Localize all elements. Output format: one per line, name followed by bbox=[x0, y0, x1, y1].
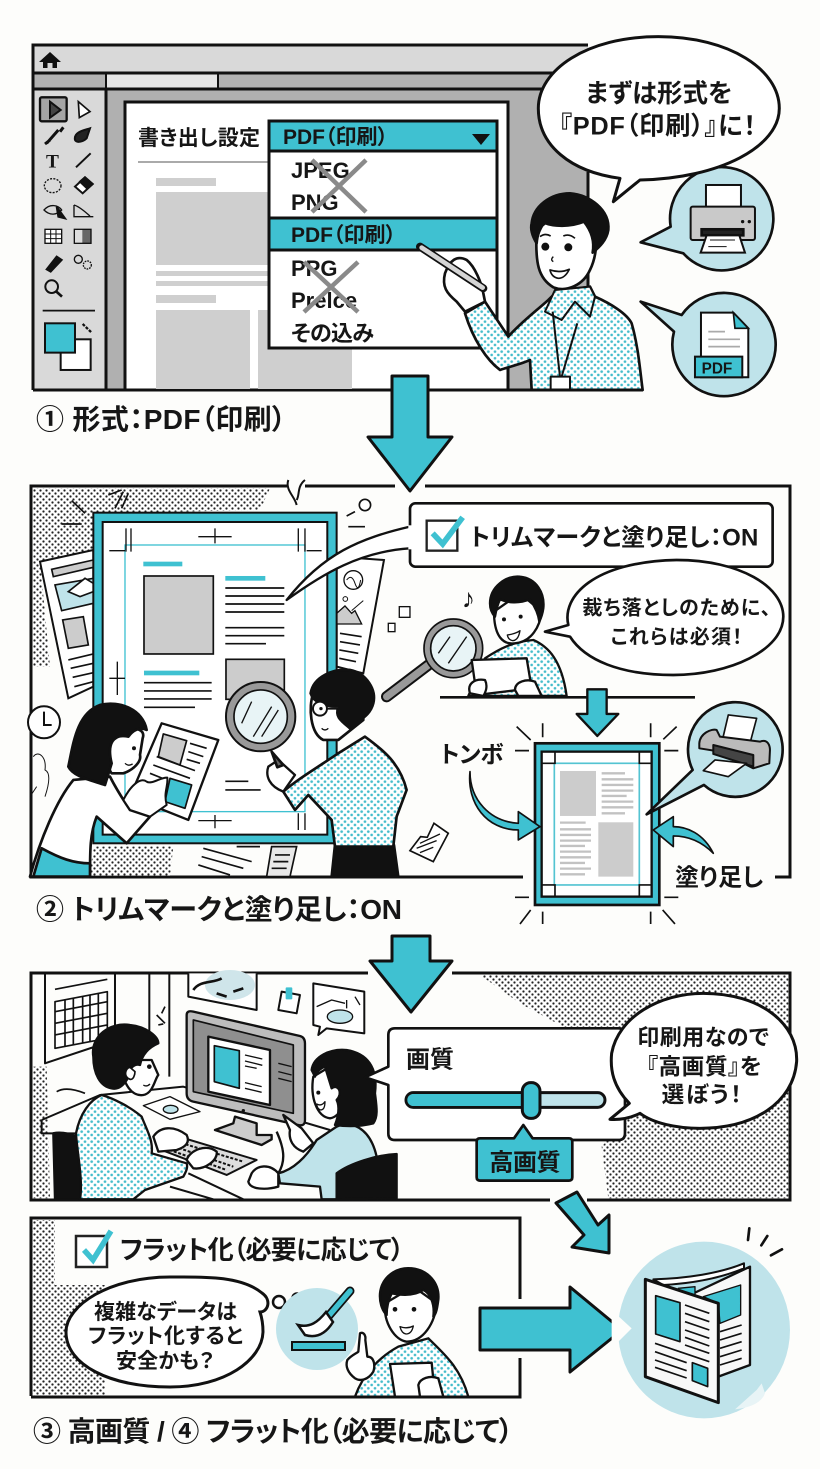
toolbar icons: T bbox=[46, 151, 59, 172]
person with pen bbox=[420, 193, 643, 390]
settings card bbox=[365, 1028, 625, 1140]
label: bleed: 塗り足し bbox=[675, 865, 763, 892]
thought bubble: 複雑なデータは bbox=[94, 1300, 237, 1324]
main speech bubble: 『PDF（印刷）』に！ bbox=[559, 113, 756, 141]
print sheet diagram bbox=[535, 743, 659, 905]
thought bubble: フラット化すると bbox=[88, 1325, 243, 1348]
format dropdown: PPG bbox=[291, 256, 337, 281]
large sheet with bleed frame bbox=[93, 513, 337, 843]
format dropdown: Prelce bbox=[291, 288, 357, 313]
format dropdown: PDF（印刷） bbox=[291, 224, 396, 247]
icon: brush bbox=[276, 1288, 358, 1370]
computer monitor bbox=[162, 1011, 305, 1175]
speech bubble: must for bleed bbox=[545, 560, 783, 675]
arrow 2 bbox=[370, 936, 452, 1012]
speech bubble: must for bleed: これらは必須！ bbox=[611, 625, 742, 648]
arrow 1 bbox=[368, 376, 452, 491]
man with magnifier bbox=[226, 670, 407, 877]
tilted page right bbox=[337, 557, 410, 673]
proof check scene bbox=[28, 480, 448, 877]
icon: clock bbox=[28, 706, 60, 738]
quality controls bbox=[365, 975, 797, 1198]
panel 4: flatten bbox=[31, 1218, 622, 1397]
man reading, magnifier bbox=[387, 576, 567, 697]
high quality tag bbox=[477, 1125, 572, 1181]
quality slider bbox=[406, 1083, 605, 1118]
label: tombo: トンボ bbox=[440, 742, 503, 768]
presenter and speech bubbles bbox=[420, 37, 779, 396]
icon: PDF file bubble: PDF bbox=[702, 360, 732, 377]
person explaining bbox=[347, 1268, 468, 1397]
speech bubble: must for bleed: 裁ち落としのために、 bbox=[582, 597, 771, 620]
arrow down to sheet bbox=[577, 689, 618, 736]
format dropdown: PDF（印刷） bbox=[283, 126, 388, 149]
main speech bubble: まずは形式を bbox=[586, 80, 732, 108]
high quality tag: 高画質 bbox=[489, 1150, 561, 1177]
heading: export settings: 書き出し設定 bbox=[138, 127, 260, 150]
tilted page left bbox=[40, 550, 93, 698]
callout: trim marks checkbox: トリムマークと塗り足し：ON bbox=[470, 524, 758, 551]
speech bubble: high quality: 選ぼう！ bbox=[662, 1082, 742, 1108]
speech bubble: high quality: 印刷用なので bbox=[637, 1025, 769, 1050]
panel 3: image quality bbox=[31, 970, 797, 1200]
format dropdown: JPEG bbox=[291, 158, 350, 183]
icon: PDF file bubble bbox=[641, 293, 776, 396]
speech bubble: high quality bbox=[610, 993, 797, 1128]
arrow: bleed bbox=[653, 817, 713, 853]
icon: printer bubble bbox=[641, 167, 773, 270]
panel 1: export settings window bbox=[33, 37, 779, 396]
thought bubble bbox=[66, 1277, 302, 1387]
icon: printer circle bbox=[647, 702, 783, 814]
toolbar icons bbox=[40, 97, 95, 370]
checkbox bbox=[76, 1231, 111, 1267]
woman with sheet bbox=[30, 704, 218, 877]
label 1: ① 形式：PDF（印刷） bbox=[36, 404, 286, 435]
trim callout and explanation bbox=[287, 503, 783, 924]
format dropdown bbox=[269, 121, 497, 348]
rays bbox=[515, 723, 678, 924]
icon: home bbox=[39, 52, 61, 68]
callout: trim marks checkbox bbox=[287, 503, 773, 600]
label 3 and 4: ③ 高画質 / ④ フラット化（必要に応じて） bbox=[33, 1416, 513, 1447]
label 2: ② トリムマークと塗り足し：ON bbox=[36, 894, 402, 925]
big arrow to brochure bbox=[480, 1287, 622, 1372]
settings card: 画質 bbox=[406, 1047, 454, 1074]
diagonal arrow bbox=[556, 1192, 609, 1253]
document placeholders bbox=[156, 178, 352, 389]
flatten heading: フラット化（必要に応じて） bbox=[120, 1235, 404, 1265]
arrow: tombo bbox=[470, 772, 540, 840]
panel 2: trim marks and bleed bbox=[28, 480, 790, 924]
format dropdown: その込み bbox=[291, 321, 374, 346]
man reading, magnifier: ♪ bbox=[462, 583, 475, 613]
main speech bubble bbox=[538, 37, 779, 202]
woman beside monitor bbox=[248, 1050, 397, 1199]
thought bubble: 安全かも？ bbox=[116, 1350, 214, 1373]
format dropdown: PNG bbox=[291, 190, 339, 215]
speech bubble: high quality: 『高画質』を bbox=[647, 1053, 762, 1079]
finished brochure bbox=[612, 1228, 790, 1418]
office scene bbox=[33, 970, 397, 1199]
man at desk bbox=[53, 1025, 217, 1199]
desk bbox=[42, 1087, 330, 1133]
desk papers bbox=[28, 706, 448, 877]
